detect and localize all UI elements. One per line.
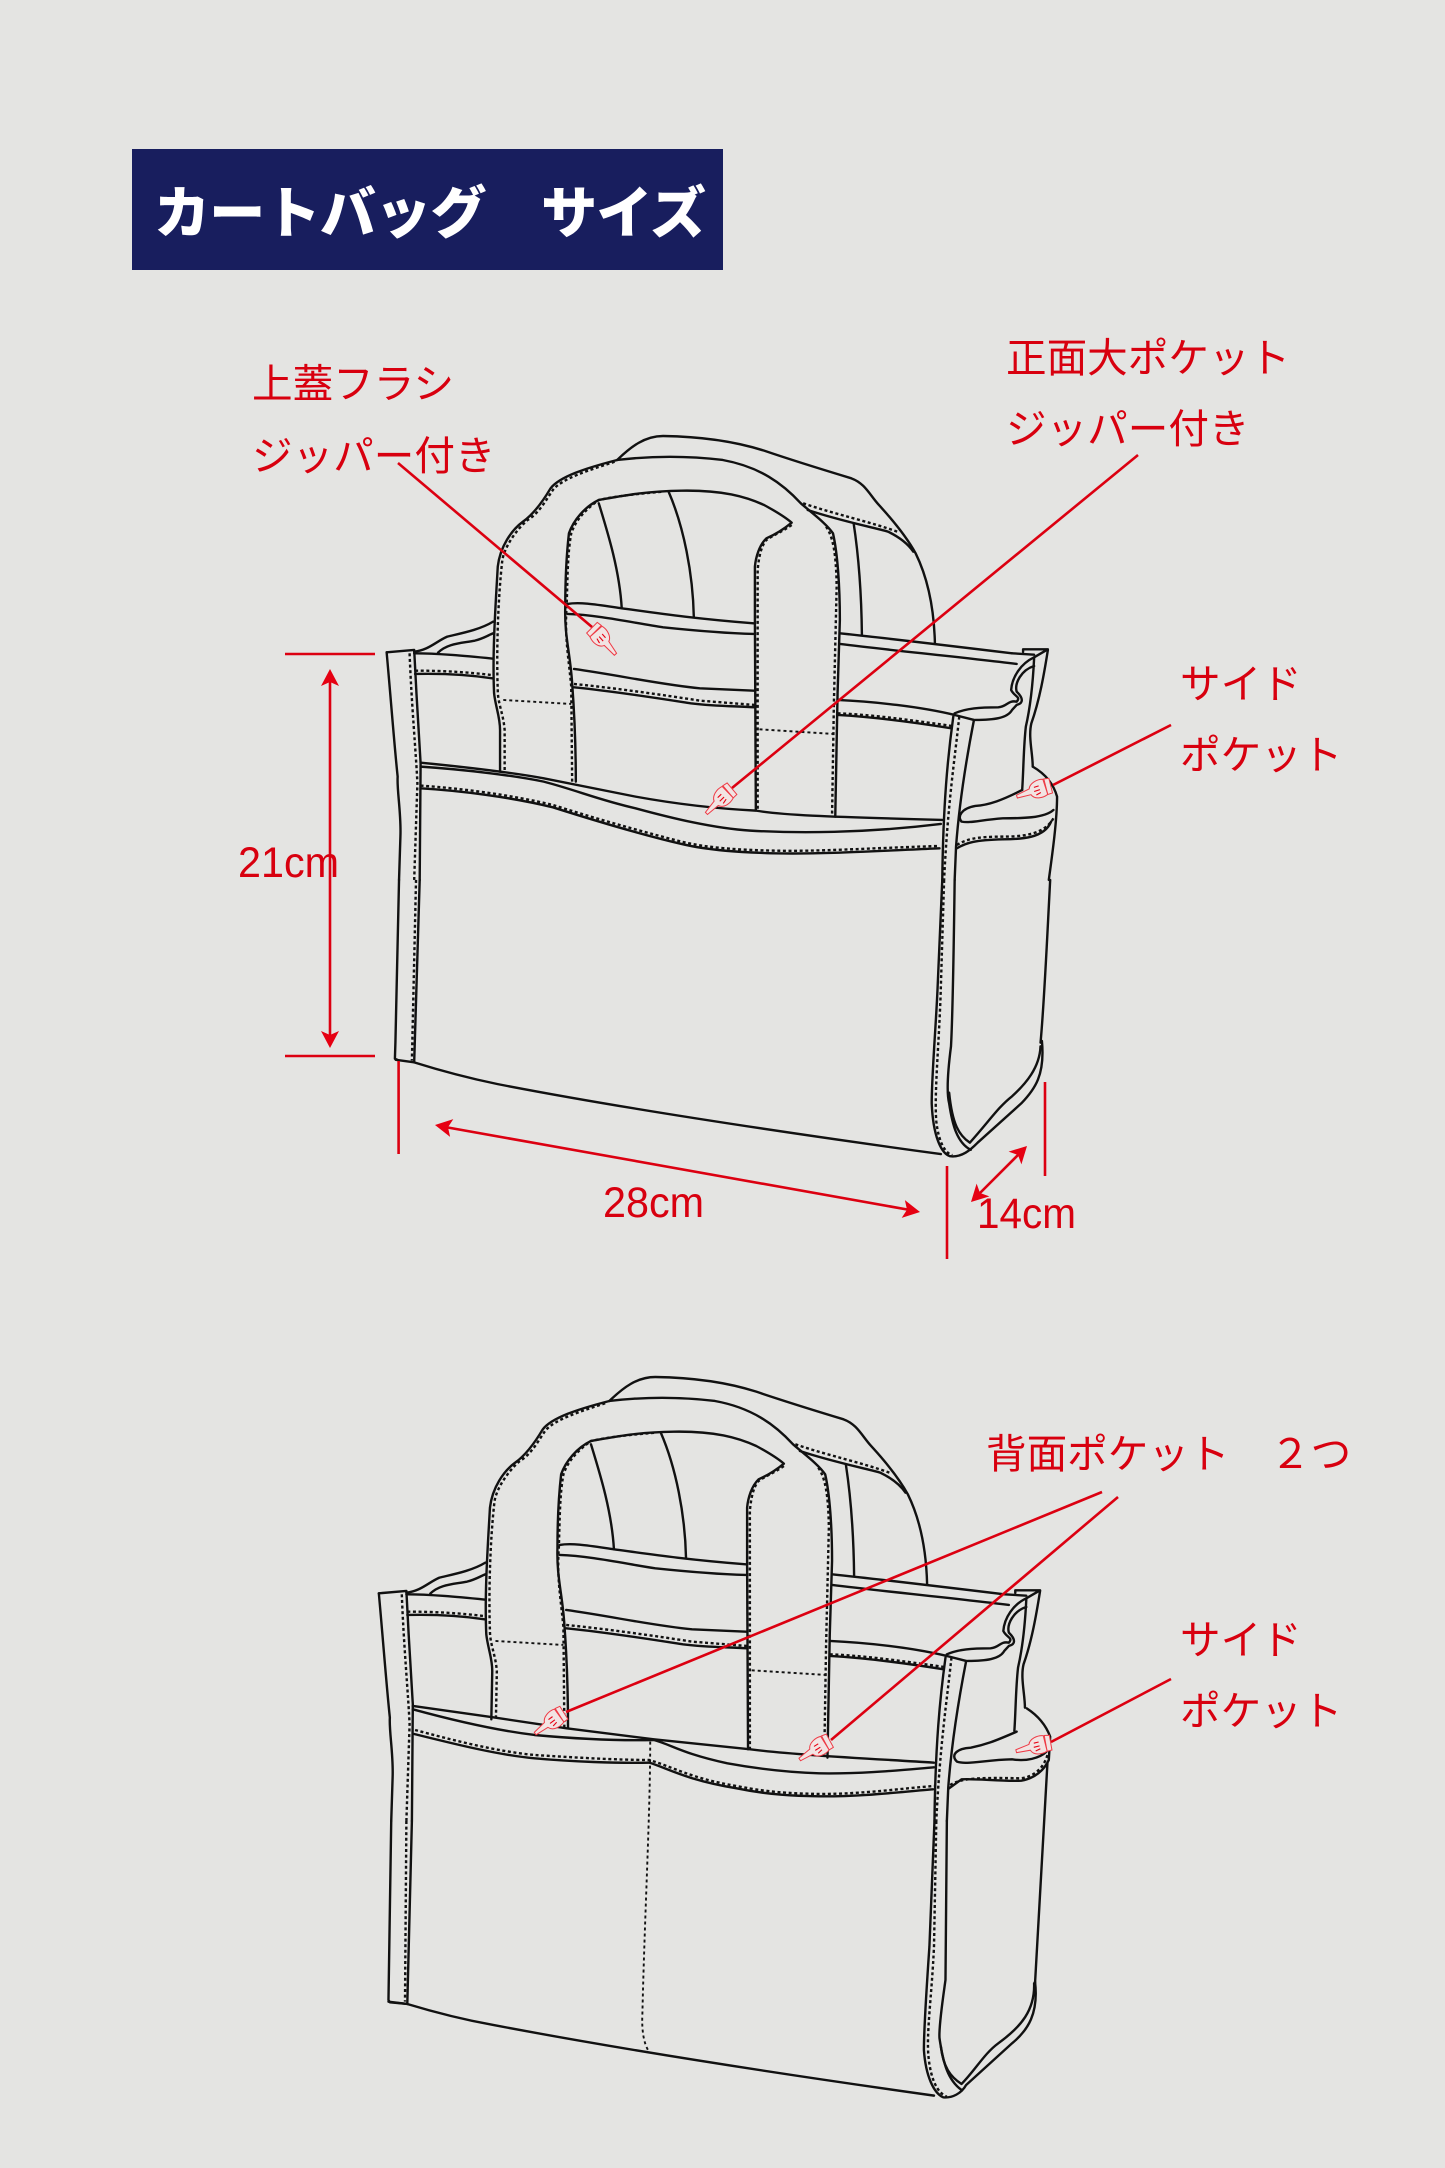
dimension: depth 14cm xyxy=(971,1082,1076,1238)
label: side pocket, front view: サイド xyxy=(1180,661,1302,707)
front pocket opening xyxy=(421,763,942,854)
bag interior and zipper xyxy=(406,1433,1040,1669)
title banner xyxy=(132,149,723,270)
label: side pocket, back view: サイド xyxy=(1180,1617,1302,1663)
title banner: カートバッグ サイズ xyxy=(154,182,706,245)
back pocket opening xyxy=(413,1706,934,2051)
front handle xyxy=(494,457,840,817)
side straps and fold xyxy=(387,650,1048,880)
back handle xyxy=(609,1377,927,1584)
bag lower body xyxy=(395,880,1050,1156)
front handle xyxy=(486,1398,832,1758)
dimension: depth 14cm: 14cm xyxy=(977,1190,1076,1238)
label: front large pocket: ジッパー付き xyxy=(1006,406,1249,452)
label: side pocket, back view: ポケット xyxy=(1180,1688,1342,1734)
icon: pointing hand, front pocket xyxy=(700,782,738,819)
dimension: width 28cm: 28cm xyxy=(603,1179,704,1227)
label: top flush zipper xyxy=(252,361,495,479)
label: top flush zipper: ジッパー付き xyxy=(252,433,495,479)
dimension: height 21cm xyxy=(238,654,375,1056)
bag interior and zipper xyxy=(414,492,1048,728)
callout line: back pocket left xyxy=(566,1492,1102,1712)
icon: pointing hand, top zipper xyxy=(585,621,622,660)
callout line: back pocket right xyxy=(831,1497,1118,1740)
icon: pointing hand, side pocket front view xyxy=(1014,777,1054,805)
side straps and fold xyxy=(379,1591,1040,1821)
side pocket xyxy=(957,767,1057,880)
label: front large pocket xyxy=(1006,335,1290,452)
callout line: top zipper xyxy=(398,463,592,627)
bag lower body xyxy=(388,1763,1047,2097)
dimension: height 21cm: 21cm xyxy=(238,839,339,887)
icon: pointing hand, back pocket left xyxy=(530,1705,569,1740)
bag illustration: back view xyxy=(379,1377,1050,2097)
label: side pocket, back view xyxy=(1180,1617,1342,1734)
label: top flush zipper: 上蓋フラシ xyxy=(252,361,454,407)
label: side pocket, front view xyxy=(1180,661,1342,778)
icon: pointing hand, side pocket back view xyxy=(1014,1733,1053,1759)
callout line: side pocket, front view xyxy=(1053,725,1171,785)
label: front large pocket: 正面大ポケット xyxy=(1006,335,1290,381)
label: side pocket, front view: ポケット xyxy=(1180,732,1342,778)
icon: pointing hand, back pocket right xyxy=(795,1733,835,1767)
bag illustration: front view xyxy=(387,436,1057,1156)
callout line: front pocket xyxy=(732,455,1138,788)
side pocket xyxy=(949,1708,1050,1788)
label: back pockets: 背面ポケット ２つ xyxy=(986,1431,1351,1477)
dimension: width 28cm xyxy=(399,1061,947,1259)
back handle xyxy=(617,436,935,643)
callout line: side pocket, back view xyxy=(1051,1679,1171,1742)
